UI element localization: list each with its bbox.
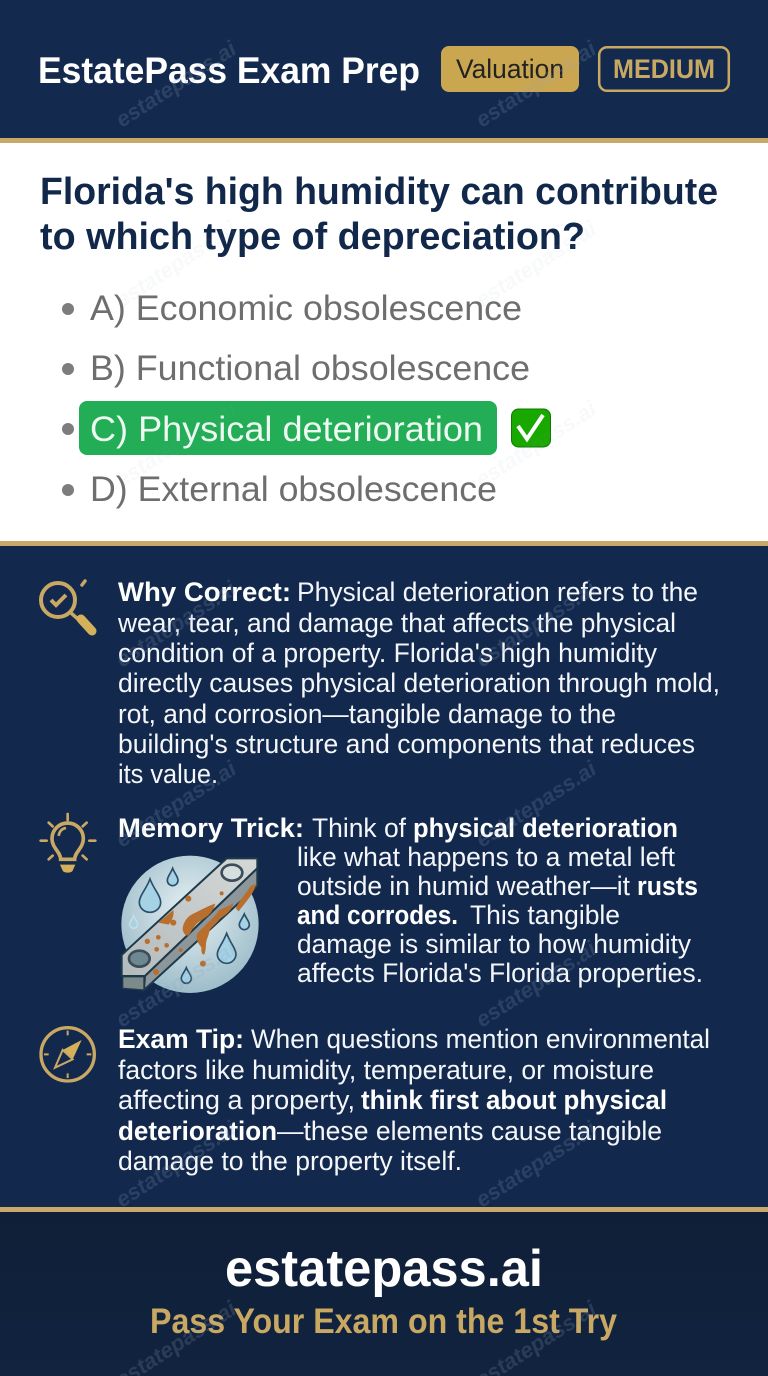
watermarks: estatepass.ai	[471, 1115, 601, 1212]
badge: Valuation	[441, 46, 579, 92]
watermarks: estatepass.ai	[471, 575, 601, 672]
question heading: to which type of depreciation?	[40, 216, 585, 258]
illustration: rusting metal beam	[121, 856, 259, 993]
icon: magnifier	[41, 581, 92, 631]
text: exam tip: factors like humidity, temperature, or moisture	[118, 1055, 654, 1085]
text: exam tip: think first about physical	[361, 1085, 667, 1115]
text: memory trick: Memory Trick:	[118, 813, 304, 843]
badge: MEDIUM: MEDIUM	[613, 54, 715, 84]
watermarks: estatepass.ai	[471, 395, 601, 492]
beam	[122, 858, 257, 976]
watermarks: estatepass.ai	[471, 935, 601, 1032]
text: memory trick: physical deterioration	[413, 813, 678, 843]
option B: B) Functional obsolescence	[90, 349, 530, 388]
text: why correct: rot, and corrosion—tangible damage to the	[118, 699, 616, 729]
text: memory trick	[118, 813, 703, 988]
question heading: Florida's high humidity can contribute	[40, 171, 718, 213]
text: why correct: directly causes physical deterioration through mold,	[118, 668, 720, 698]
text: exam tip: affecting a property,	[118, 1085, 355, 1115]
panel: header	[0, 0, 768, 138]
text: why correct: its value.	[118, 759, 218, 789]
badge: Valuation: Valuation	[456, 54, 564, 84]
text: memory trick: like what happens to a metal left	[297, 842, 675, 872]
panel: question	[0, 143, 768, 541]
text: exam tip: damage to the property itself.	[118, 1146, 462, 1176]
bolt holes	[222, 865, 242, 881]
text: exam tip: —these elements cause tangible	[277, 1116, 662, 1146]
rust patches	[145, 884, 256, 975]
text: memory trick: rusts	[637, 871, 698, 901]
watermarks	[111, 35, 601, 1376]
watermarks: estatepass.ai	[471, 755, 601, 852]
text: memory trick: Think of	[312, 813, 406, 843]
text: why correct: condition of a property. Florida's high humidity	[118, 638, 657, 668]
icon: light bulb	[41, 814, 95, 873]
badge: MEDIUM	[599, 47, 729, 91]
watermarks: estatepass.ai	[111, 935, 241, 1032]
text: why correct: wear, tear, and damage that affects the physical	[117, 608, 676, 638]
panel: footer	[0, 1212, 768, 1376]
text: why correct	[117, 577, 720, 789]
watermarks: estatepass.ai	[111, 755, 241, 852]
text: exam tip	[118, 1024, 710, 1176]
watermarks: estatepass.ai	[471, 215, 601, 312]
text: exam tip: When questions mention environmental	[251, 1024, 710, 1054]
water drops	[130, 868, 249, 983]
text: memory trick: affects Florida's Florida properties.	[297, 958, 703, 988]
text: memory trick: This tangible	[470, 900, 620, 930]
text: exam tip: Exam Tip:	[118, 1024, 244, 1054]
watermarks: estatepass.ai	[111, 395, 241, 492]
option C: correct answer	[62, 401, 497, 455]
icon: check mark	[512, 409, 550, 447]
text: memory trick: outside in humid weather—it	[297, 871, 630, 901]
text: memory trick: and corrodes.	[297, 900, 458, 930]
option D: D) External obsolescence	[90, 470, 497, 509]
text: why correct: Physical deterioration refers to the	[297, 577, 698, 607]
question heading	[40, 171, 718, 258]
title: EstatePass Exam Prep	[38, 50, 420, 91]
footer tagline: Pass Your Exam on the 1st Try	[150, 1302, 617, 1341]
text: why correct: Why Correct:	[118, 577, 291, 607]
watermarks: estatepass.ai	[111, 575, 241, 672]
watermarks: estatepass.ai	[471, 35, 601, 132]
text: why correct: building's structure and components that reduces	[118, 729, 695, 759]
option C: correct answer: C) Physical deterioration	[90, 410, 483, 449]
watermarks: estatepass.ai	[111, 1115, 241, 1212]
text: exam tip: deterioration	[118, 1116, 277, 1146]
watermarks: estatepass.ai	[111, 215, 241, 312]
option A: A) Economic obsolescence	[90, 289, 522, 328]
panel: explanations	[0, 546, 768, 1207]
footer brand: estatepass.ai	[225, 1240, 543, 1298]
watermarks: estatepass.ai	[111, 35, 241, 132]
icon: compass	[41, 1028, 94, 1081]
text: memory trick: damage is similar to how humidity	[297, 929, 691, 959]
